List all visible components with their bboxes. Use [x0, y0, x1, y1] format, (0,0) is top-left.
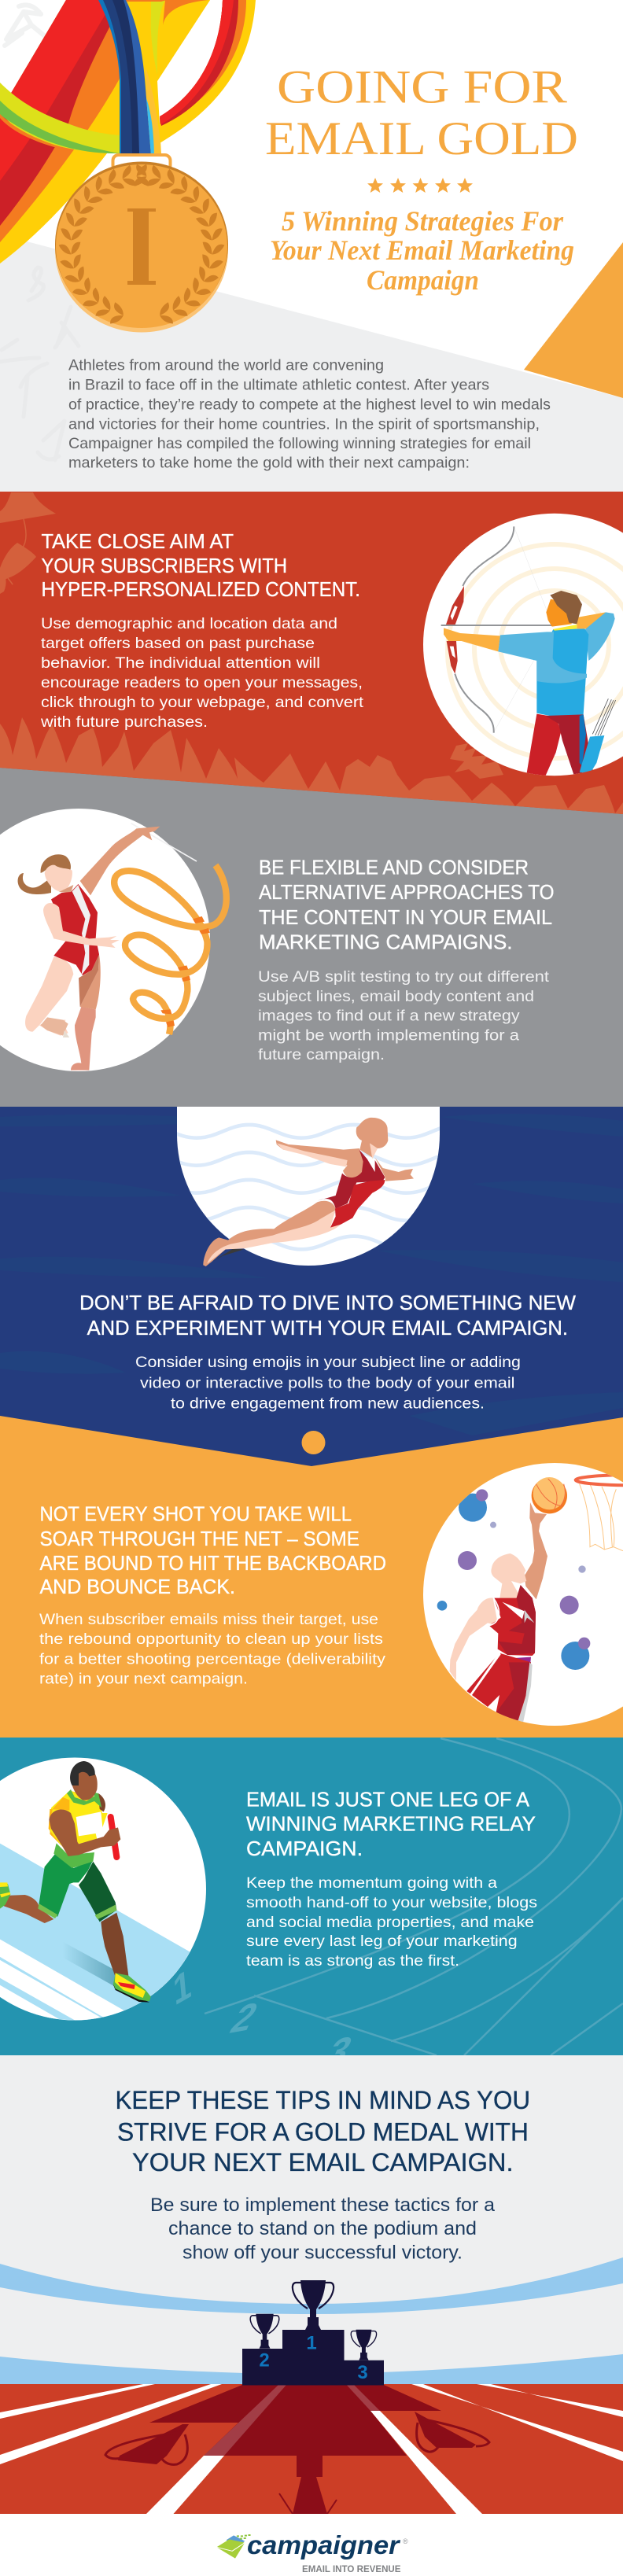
text block: emojis and polls: to drive engagement from new audiences.: [171, 1395, 485, 1413]
text block: introduction: of practice, they’re ready to compete at the highest level to win medals: [68, 396, 551, 414]
podium number 2: 2: [259, 2350, 270, 2371]
medal: ring: [113, 155, 170, 171]
track lane lines: [0, 2384, 623, 2464]
medal: numeral one: [127, 208, 156, 285]
text block: rebound opportunity: [39, 1611, 385, 1688]
icon: campaigner envelope: [216, 2534, 251, 2559]
illustration: relay runner in circle: [0, 1757, 206, 2020]
panel: hero background: [0, 0, 623, 492]
heading: one leg of a relay: EMAIL IS JUST ONE LEG OF A: [246, 1789, 529, 1811]
text block: introduction: and victories for their home countries. In the spirit of sportsmanship,: [68, 416, 540, 433]
text block: demographic data: encourage readers to open your messages,: [41, 674, 363, 691]
logo wordmark: campaigner: [247, 2530, 401, 2559]
heading: keep these tips: STRIVE FOR A GOLD MEDAL WITH: [117, 2117, 529, 2146]
heading: take close aim: HYPER-PERSONALIZED CONTENT.: [41, 579, 360, 601]
podium number 3: 3: [357, 2362, 368, 2383]
centre lane lines: [146, 2385, 482, 2514]
heading: be flexible: BE FLEXIBLE AND CONSIDER: [259, 857, 529, 879]
heading: be flexible: [259, 857, 554, 953]
heading: keep these tips: [115, 2086, 530, 2176]
heading: keep these tips: KEEP THESE TIPS IN MIND AS YOU: [115, 2086, 530, 2114]
text block: demographic data: [40, 615, 364, 731]
illustration: winners podium: [242, 2280, 384, 2385]
heading: one leg of a relay: WINNING MARKETING RELAY: [246, 1814, 536, 1836]
text block: A/B testing: [258, 968, 550, 1063]
decoration: orange corner triangle: [524, 242, 623, 398]
text block: demographic data: target offers based on past purchase: [41, 635, 315, 652]
icon: five stars: [367, 178, 473, 193]
ribbon: right loop: [160, 0, 256, 143]
heading: not every shot: [39, 1504, 386, 1598]
decoration: running track lines: [205, 1738, 623, 2055]
title: [265, 61, 578, 164]
panel: closing section: [0, 2055, 623, 2514]
text block: momentum: smooth hand-off to your website, blogs: [246, 1894, 537, 1911]
decoration: lane numbers: 3: [319, 2028, 359, 2076]
text block: momentum: [246, 1874, 537, 1970]
ribbon: left bands: [0, 0, 210, 263]
text block: rebound opportunity: When subscriber emails miss their target, use: [39, 1611, 378, 1628]
text block: closing message: [150, 2195, 496, 2264]
panel: gymnastics section: [0, 763, 623, 1107]
icon: bronze trophy: [351, 2330, 377, 2360]
text block: A/B testing: images to find out if a new strategy: [258, 1008, 520, 1025]
decoration: foliage cluster: [450, 743, 503, 779]
illustration: gold medal with ribbons: [0, 0, 256, 332]
ribbon: green band: [0, 83, 120, 153]
text block: demographic data: with future purchases.: [40, 713, 208, 731]
text block: momentum: and social media properties, and make: [246, 1914, 534, 1931]
panel: basketball section: [0, 1408, 623, 1738]
heading: dive into something new: [79, 1292, 576, 1340]
heading: keep these tips: YOUR NEXT EMAIL CAMPAIGN.: [132, 2148, 513, 2176]
heading: not every shot: SOAR THROUGH THE NET – SOME: [39, 1528, 359, 1550]
heading: not every shot: NOT EVERY SHOT YOU TAKE WILL: [39, 1504, 352, 1526]
text block: emojis and polls: [135, 1354, 521, 1413]
heading: take close aim: YOUR SUBSCRIBERS WITH: [41, 555, 287, 577]
heading: dive into something new: DON’T BE AFRAID TO DIVE INTO SOMETHING NEW: [79, 1292, 576, 1314]
text block: momentum: sure every last leg of your marketing: [246, 1933, 518, 1950]
text block: A/B testing: might be worth implementing for a: [258, 1027, 519, 1045]
text block: closing message: show off your successful victory.: [182, 2242, 463, 2264]
text block: emojis and polls: Consider using emojis in your subject line or adding: [135, 1354, 521, 1371]
decoration: lane numbers: 1: [171, 1960, 193, 2014]
registered mark: ®: [403, 2537, 408, 2545]
heading: be flexible: MARKETING CAMPAIGNS.: [259, 931, 513, 953]
illustration: track with podium shadow: [0, 2384, 623, 2514]
heading: not every shot: AND BOUNCE BACK.: [39, 1576, 235, 1598]
panel: diving section: [0, 1107, 623, 1466]
text block: momentum: Keep the momentum going with a: [246, 1874, 497, 1892]
heading: dive into something new: AND EXPERIMENT WITH YOUR EMAIL CAMPAIGN.: [87, 1317, 568, 1340]
heading: take close aim: TAKE CLOSE AIM AT: [41, 531, 234, 553]
panel: archery section: [0, 492, 623, 814]
text block: closing message: chance to stand on the podium and: [168, 2218, 477, 2239]
ribbon: blue strap: [98, 0, 161, 155]
icon: silver trophy: [250, 2314, 279, 2349]
text block: A/B testing: subject lines, email body content and: [258, 988, 534, 1005]
subtitle: [270, 205, 574, 296]
heading: not every shot: ARE BOUND TO HIT THE BACKBOARD: [39, 1553, 386, 1575]
medal: disk: [55, 162, 228, 332]
text block: demographic data: Use demographic and location data and: [41, 615, 337, 632]
podium number 1: 1: [306, 2333, 317, 2354]
text block: demographic data: behavior. The individual attention will: [41, 654, 320, 672]
subtitle: Campaign: [367, 264, 479, 296]
text block: momentum: team is as strong as the first.: [246, 1952, 459, 1970]
text block: closing message: Be sure to implement these tactics for a: [150, 2195, 496, 2216]
decoration: lane numbers: 2: [224, 1994, 264, 2042]
icon: orange dot: [302, 1431, 326, 1454]
icon: gold trophy: [293, 2280, 334, 2330]
subtitle: 5 Winning Strategies For: [282, 205, 564, 237]
text block: A/B testing: Use A/B split testing to try out different: [258, 968, 550, 986]
text block: A/B testing: future campaign.: [258, 1046, 385, 1063]
illustration: diver in circle: [177, 1107, 440, 1266]
text block: introduction: [68, 357, 551, 472]
heading: be flexible: ALTERNATIVE APPROACHES TO: [259, 882, 554, 904]
heading: be flexible: THE CONTENT IN YOUR EMAIL: [259, 907, 552, 929]
text block: rebound opportunity: the rebound opportunity to clean up your lists: [39, 1631, 383, 1648]
panel: relay section: [0, 1738, 623, 2076]
decoration: stadium arcs: [0, 2257, 623, 2385]
text block: introduction: Campaigner has compiled the following winning strategies for email: [68, 435, 531, 452]
text block: introduction: in Brazil to face off in the ultimate athletic contest. After years: [68, 376, 489, 393]
medal: wreath: [59, 164, 224, 326]
text block: rebound opportunity: rate) in your next campaign.: [39, 1671, 248, 1688]
title: GOING FOR: [277, 61, 567, 113]
text block: introduction: marketers to take home the gold with their next campaign:: [68, 455, 470, 472]
heading: one leg of a relay: [246, 1789, 536, 1860]
text block: introduction: Athletes from around the world are convening: [68, 357, 384, 374]
text block: emojis and polls: video or interactive polls to the body of your email: [140, 1375, 514, 1392]
illustration: gymnast in circle: [0, 809, 227, 1071]
illustration: basketball player in circle: [423, 1463, 623, 1726]
text block: demographic data: click through to your webpage, and convert: [41, 694, 364, 711]
decoration: lane numbers: [175, 1971, 351, 2055]
subtitle: Your Next Email Marketing: [270, 234, 574, 266]
illustration: archer in circle: [423, 514, 623, 776]
decoration: grass: [0, 717, 623, 814]
panel: footer logo: [0, 2514, 623, 2576]
title: EMAIL GOLD: [265, 112, 578, 164]
ribbon: centre yellow: [126, 0, 210, 155]
text block: rebound opportunity: for a better shooting percentage (deliverability: [39, 1650, 385, 1668]
decoration: top-left leaves: [0, 492, 56, 594]
podium shadow: [105, 2385, 489, 2514]
tagline: EMAIL INTO REVENUE: [302, 2563, 401, 2574]
heading: one leg of a relay: CAMPAIGN.: [246, 1838, 363, 1860]
heading: take close aim: [41, 531, 360, 601]
